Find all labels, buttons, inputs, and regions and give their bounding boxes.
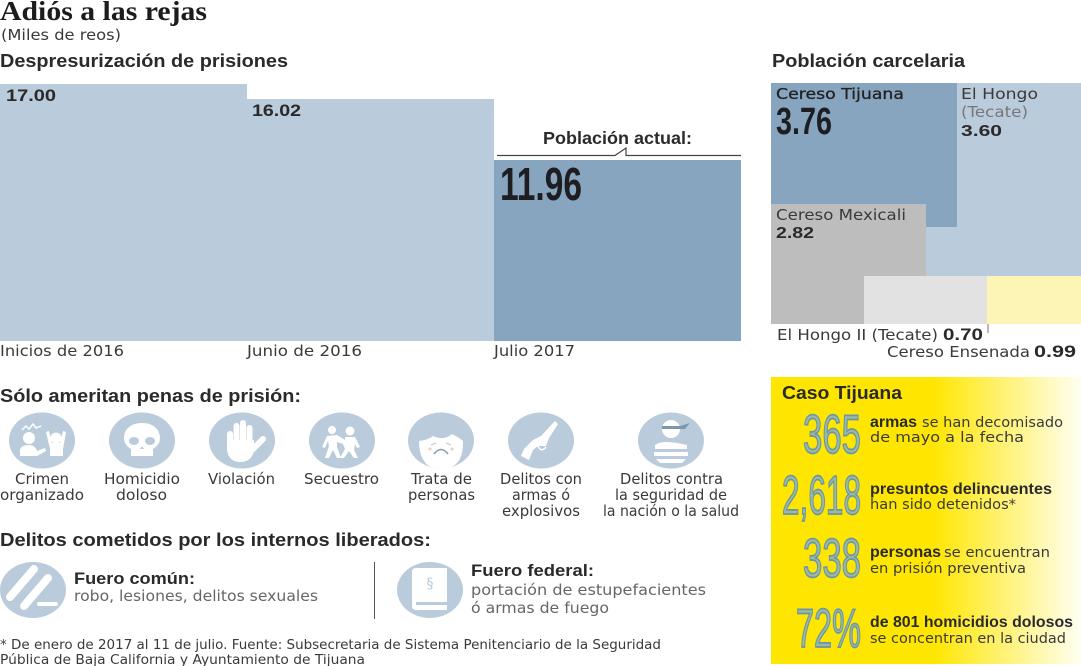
label: cereso mexicali: Cereso Mexicali xyxy=(776,206,906,224)
stat: 365: de mayo a la fecha xyxy=(870,430,1024,446)
block: el hongo II xyxy=(864,276,987,324)
block: el hongo tecate xyxy=(771,83,1081,324)
label: delitos con armas xyxy=(500,470,582,520)
stat: 338: 338 xyxy=(803,527,861,589)
stat: 72% xyxy=(796,597,1073,659)
bar: julio 2017 xyxy=(494,160,741,341)
panel: caso tijuana xyxy=(771,377,1081,664)
label: violación: Violación xyxy=(208,470,275,488)
value 0.70: 0.70 xyxy=(943,326,983,344)
label: secuestro: Secuestro xyxy=(304,470,379,488)
text: fuero común: robo, lesiones, delitos sexuales xyxy=(74,587,318,605)
stat: 2,618: presuntos delincuentes xyxy=(870,481,1052,498)
label: crimen organizado: Crimen xyxy=(15,470,69,488)
label: tecate: (Tecate) xyxy=(961,103,1028,121)
panel: población carcelaria xyxy=(771,50,1081,361)
footnote: * De enero de 2017 al 11 de julio. Fuente: Subsecretaria de Sistema Penitenciario de la Seguridad xyxy=(0,638,661,653)
label: homicidio doloso: Homicidio xyxy=(104,470,180,488)
icon: libro fuero federal xyxy=(397,562,463,618)
label: el hongo II: El Hongo II (Tecate) xyxy=(777,326,938,344)
block: cereso ensenada xyxy=(987,276,1081,324)
stat: 72%: de 801 homicidios dolosos xyxy=(870,614,1073,631)
stat: 2,618 xyxy=(782,464,1052,526)
stat: 72%: se concentran en la ciudad xyxy=(870,631,1066,647)
leader tick xyxy=(987,324,989,333)
heading: caso tijuana: Caso Tijuana xyxy=(782,383,903,403)
text: fuero federal: portación de estupefacientes xyxy=(471,581,706,599)
bar: junio de 2016 xyxy=(247,99,494,341)
stat: 365: armas xyxy=(870,414,917,431)
label: homicidio doloso xyxy=(104,470,180,504)
callout line xyxy=(497,148,741,156)
heading: despresurización: Despresurización de prisiones xyxy=(0,50,288,71)
icon: delitos con armas xyxy=(508,412,574,468)
stat: 338: en prisión preventiva xyxy=(870,561,1026,577)
bar: inicios de 2016 xyxy=(0,84,247,341)
value 2.82: 2.82 xyxy=(776,225,814,242)
label: delitos con armas: Delitos con xyxy=(500,470,582,488)
subtitle: (Miles de reos) xyxy=(1,26,121,44)
label: delitos contra la seguridad: la nación o la salud xyxy=(603,502,739,520)
label: delitos contra la seguridad: Delitos contra xyxy=(620,470,723,488)
icon: trata de personas xyxy=(408,412,474,470)
text: fuero común: Fuero común: xyxy=(74,569,195,588)
label: cereso tijuana: Cereso Tijuana xyxy=(776,85,904,103)
label: delitos con armas: explosivos xyxy=(502,502,580,520)
heading: delitos cometidos: Delitos cometidos por los internos liberados: xyxy=(0,529,431,550)
label: trata de personas: Trata de xyxy=(410,470,472,488)
stat: 338 xyxy=(803,527,1050,589)
icon: mazo fuero común xyxy=(0,562,66,618)
label: crimen organizado xyxy=(0,470,84,504)
panel background xyxy=(771,377,1081,664)
stat: 365: 365 xyxy=(803,403,861,465)
label: crimen organizado: organizado xyxy=(0,486,84,504)
value 0.99: 0.99 xyxy=(1034,343,1076,361)
footnote xyxy=(0,638,661,666)
heading: población carcelaria: Población carcelaria xyxy=(772,50,966,71)
icon: violación xyxy=(209,412,275,468)
text: fuero común xyxy=(74,569,318,605)
stat: 338: personas xyxy=(870,544,941,561)
text: fuero federal: ó armas de fuego xyxy=(471,599,609,617)
label: delitos contra la seguridad xyxy=(603,470,739,520)
callout label: población actual: Población actual: xyxy=(543,128,692,148)
value 17.00: 17.00 xyxy=(6,86,56,105)
label: delitos contra la seguridad: la seguridad de xyxy=(615,486,727,504)
icon: delitos contra la seguridad xyxy=(638,412,704,468)
axis label: inicios de 2016: Inicios de 2016 xyxy=(0,342,124,360)
icon: libro fuero federal: § xyxy=(426,576,434,592)
axis label: junio de 2016: Junio de 2016 xyxy=(246,342,362,360)
stat: 2,618: 2,618 xyxy=(782,464,861,526)
label: el hongo: El Hongo xyxy=(961,85,1038,103)
block: cereso tijuana xyxy=(771,83,957,227)
value 11.96: 11.96 xyxy=(500,158,582,210)
block: cereso mexicali xyxy=(771,204,926,324)
text: fuero federal: Fuero federal: xyxy=(471,561,594,580)
label: trata de personas: personas xyxy=(408,486,475,504)
icon: secuestro xyxy=(309,412,375,468)
stat: 338: se encuentran xyxy=(944,545,1050,561)
heading: sólo ameritan: Sólo ameritan penas de prisión: xyxy=(0,385,301,406)
icon: homicidio doloso xyxy=(109,412,175,468)
panel: despresurización de prisiones xyxy=(0,50,741,360)
icon: crimen organizado xyxy=(9,412,75,468)
stat: 2,618: han sido detenidos* xyxy=(870,497,1016,513)
stat: 365: se han decomisado xyxy=(922,415,1063,431)
value 3.60: 3.60 xyxy=(961,123,1002,140)
axis label: julio 2017: Julio 2017 xyxy=(493,342,575,360)
stat: 72%: 72% xyxy=(796,597,861,659)
value 3.76: 3.76 xyxy=(776,101,832,143)
text: fuero federal xyxy=(471,561,706,617)
stat: 365 xyxy=(803,403,1063,465)
value 16.02: 16.02 xyxy=(252,101,301,120)
label: homicidio doloso: doloso xyxy=(116,486,167,504)
label: cereso ensenada: Cereso Ensenada xyxy=(887,343,1030,361)
label: trata de personas xyxy=(408,470,475,504)
label: delitos con armas: armas ó xyxy=(512,486,570,504)
